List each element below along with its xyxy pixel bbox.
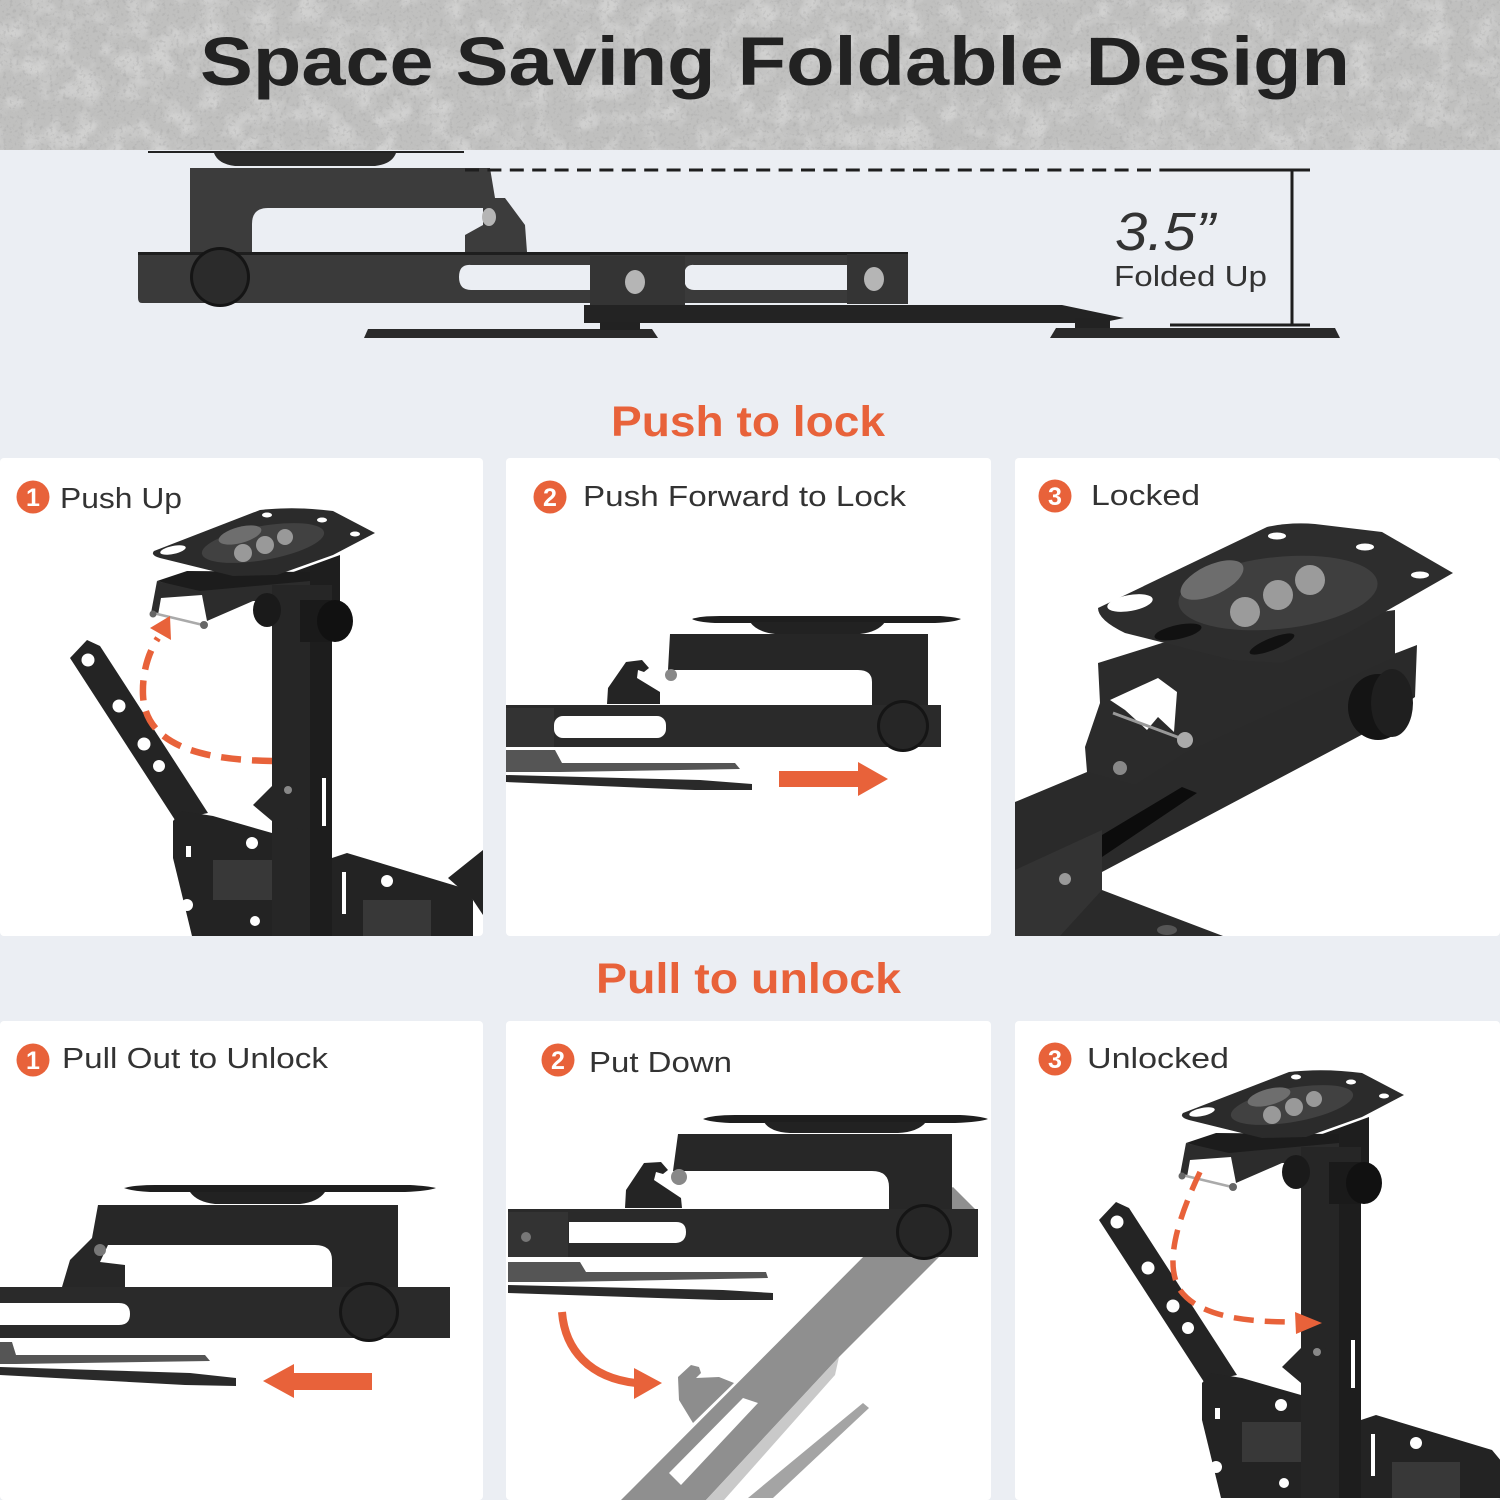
arrow	[263, 1364, 372, 1398]
ghost slot	[669, 1398, 758, 1485]
step label: Push Up	[60, 483, 182, 515]
step badge: 2	[543, 484, 557, 512]
mount illustration	[1099, 1070, 1500, 1498]
step badge	[16, 1044, 50, 1076]
step label: Push Forward to Lock	[583, 481, 907, 513]
panel: pull out	[0, 1021, 483, 1500]
ghost hook	[678, 1365, 734, 1423]
step badge	[542, 1044, 574, 1076]
arrow	[1173, 1172, 1322, 1334]
arrow	[143, 616, 272, 761]
ghost arm	[621, 1187, 978, 1500]
panel: push up	[0, 458, 483, 936]
panel: locked	[1015, 458, 1500, 936]
step badge: 1	[26, 1047, 40, 1075]
panel: unlocked	[1015, 1021, 1500, 1500]
step label: Put Down	[589, 1047, 732, 1079]
arrow	[779, 762, 888, 796]
step badge	[1038, 480, 1072, 512]
panel: push forward	[506, 458, 991, 936]
step badge: 2	[551, 1047, 565, 1075]
mount illustration	[0, 1185, 450, 1386]
step badge	[1038, 1042, 1072, 1076]
step badge: 3	[1048, 1046, 1062, 1074]
dimension label: 3.5”	[1115, 202, 1217, 262]
mount illustration	[506, 616, 961, 790]
heading: pull to unlock: Pull to unlock	[596, 955, 901, 1003]
panel: concrete header	[0, 0, 1500, 150]
panel: folded mount diagram	[138, 151, 1340, 338]
step badge: 3	[1048, 483, 1062, 511]
title: Space Saving Foldable Design	[200, 23, 1350, 100]
arrow	[562, 1312, 662, 1399]
step badge: 1	[26, 484, 40, 512]
step label: Pull Out to Unlock	[62, 1043, 329, 1075]
mount illustration	[508, 1115, 988, 1300]
dimension label: Folded Up	[1114, 261, 1267, 293]
heading: push to lock: Push to lock	[611, 398, 885, 446]
step badge	[534, 480, 566, 514]
step label: Locked	[1091, 480, 1200, 512]
step badge	[16, 480, 50, 514]
step label: Unlocked	[1087, 1043, 1229, 1075]
ghost fork	[706, 1357, 869, 1500]
mount illustration	[70, 508, 483, 936]
dimension label	[1114, 202, 1267, 293]
dimension line	[465, 170, 1310, 325]
panel: put down	[506, 1021, 991, 1500]
mount illustration	[1015, 523, 1453, 936]
